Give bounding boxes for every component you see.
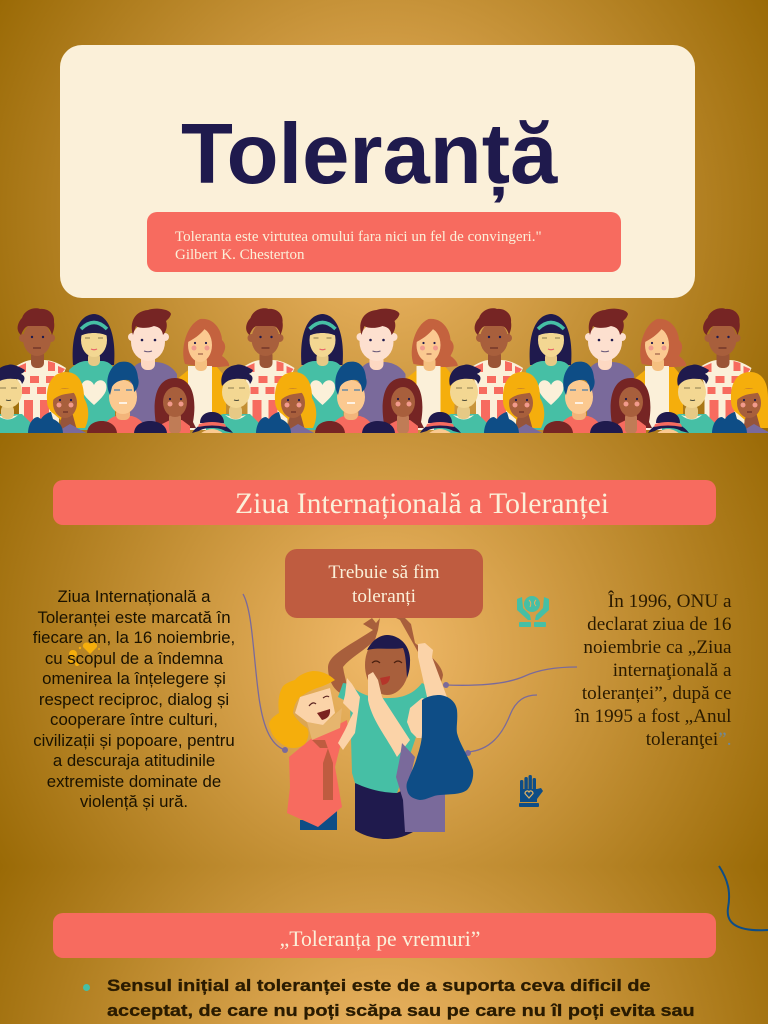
crowd of diverse people [0, 308, 768, 433]
title: Toleranță [181, 107, 557, 202]
person: central man [328, 618, 443, 839]
quote text: Toleranta este virtutea omului fara nici un fel de convingeri." [175, 229, 542, 245]
connector dots [282, 682, 471, 756]
icon: yellow heart [68, 642, 100, 666]
slide background: middle [0, 433, 768, 866]
text block: left description: extremiste dominate de [47, 772, 221, 790]
quote box [147, 212, 621, 272]
callout text: Trebuie să fim [328, 562, 440, 583]
icon: teal hands holding globe [517, 596, 549, 627]
title card [60, 45, 695, 298]
text block: left description: Toleranței este marcată în [37, 608, 231, 626]
heading text: „Toleranța pe vremuri” [280, 927, 480, 951]
bullet text [107, 976, 695, 1020]
quote text [175, 229, 542, 263]
person: blue-haired woman [368, 643, 473, 832]
slide background: top [0, 0, 768, 433]
text block: right description: toleranţei”. [646, 729, 732, 750]
quote text: Gilbert K. Chesterton [175, 247, 305, 263]
middle row of people [0, 362, 768, 434]
bullet text: Sensul inițial al toleranței este de a suporta ceva dificil de [107, 976, 651, 995]
person: blonde woman [269, 671, 360, 830]
text block: right description: internaţională a [613, 660, 732, 681]
text block: left description: respect reciproc, dialog și [39, 690, 229, 708]
text block: left description: cu scopul de a îndemna [45, 648, 223, 668]
callout text [328, 562, 440, 607]
callout: Trebuie să fim toleranți [285, 549, 483, 618]
bullet marker [82, 984, 90, 990]
decorative blue curve [718, 866, 768, 932]
heading: Ziua Internațională a Toleranței [53, 480, 716, 525]
text block: left description: civilizații și popoare, pentru [33, 730, 235, 750]
text block: left description: omenirea la înțelegere și [42, 669, 226, 688]
central illustration: three people celebrating [242, 594, 577, 839]
text block: right description [574, 590, 732, 750]
slide background: bottom [0, 866, 768, 1024]
text block: left description: cooperare între culturi, [50, 710, 218, 729]
text block: left description: a descuraja atitudinile [53, 751, 215, 770]
text block: right description: declarat ziua de 16 [587, 614, 732, 635]
heading: Toleranța pe vremuri [53, 913, 716, 958]
text block: left description: Ziua Internațională a [58, 587, 210, 606]
bullet text: acceptat, de care nu poți scăpa sau pe care nu îl poți evita sau [107, 1000, 695, 1020]
text block: left description: fiecare an, la 16 noiembrie, [33, 628, 235, 647]
front row of people [28, 412, 768, 434]
back row of people [13, 308, 768, 434]
icon: blue hand with heart [519, 775, 543, 807]
text block: right description: noiembrie ca „Ziua [583, 637, 732, 658]
text block: right description: toleranței”, după ce [582, 683, 732, 704]
connector lines [243, 594, 577, 752]
text block: left description [33, 587, 235, 811]
text block: left description: violență și ură. [80, 792, 188, 811]
text block: right description: în 1995 a fost „Anul [575, 706, 732, 727]
callout text: toleranți [352, 586, 416, 607]
heading text: Ziua Internațională a Toleranței [235, 488, 609, 520]
text block: right description: În 1996, ONU a [608, 591, 732, 612]
